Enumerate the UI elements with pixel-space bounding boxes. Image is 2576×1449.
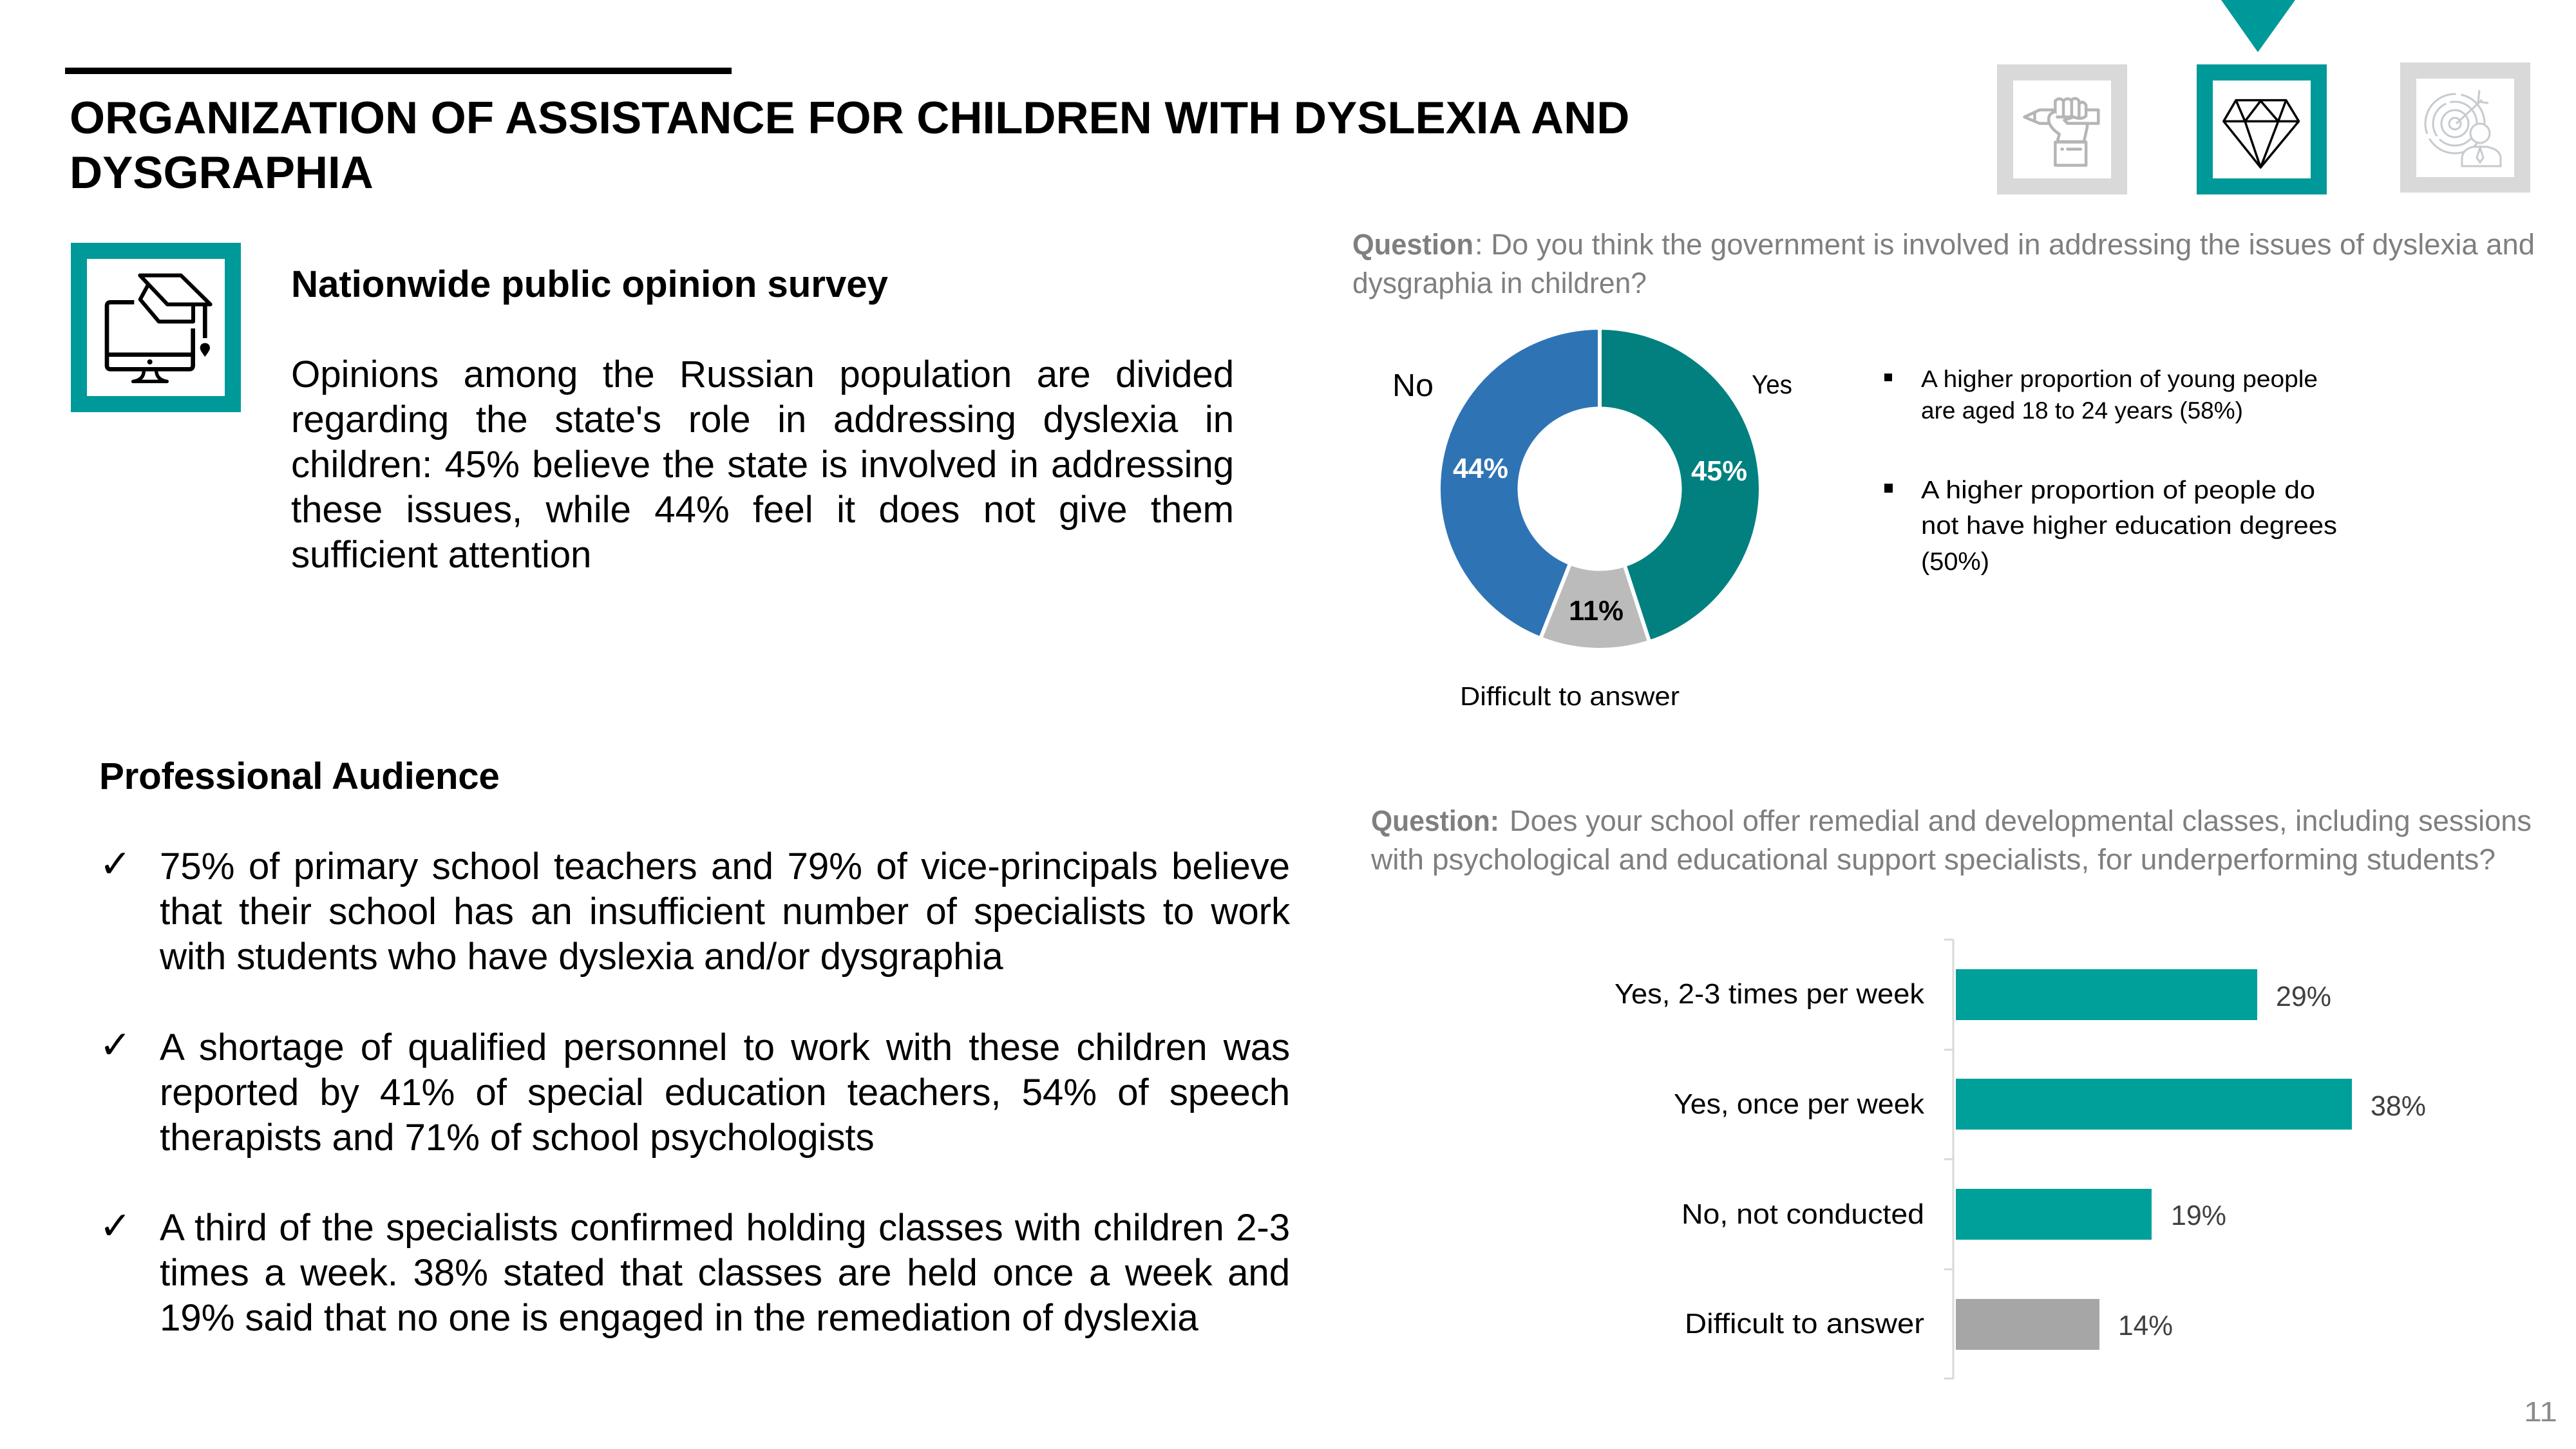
page number: 11 bbox=[2524, 1396, 2557, 1428]
icon: target with person bbox=[2400, 62, 2530, 193]
bar category labels bbox=[1615, 978, 1925, 1340]
donut value labels: 44% bbox=[1453, 453, 1508, 484]
title: DYSGRAPHIA bbox=[70, 147, 374, 198]
bar value labels: 19% bbox=[2171, 1200, 2226, 1231]
text block: bullet 3 class frequency bbox=[160, 1207, 1290, 1339]
bar chart axis bbox=[1944, 940, 1953, 1379]
donut category labels bbox=[1392, 368, 1792, 711]
text block: bullet 1 shortage of specialists bbox=[160, 846, 1291, 978]
text block: bullet 2 qualified personnel: therapists and 71% of school psychologists bbox=[160, 1117, 874, 1159]
text block: bullet 3 class frequency: times a week. 38% stated that classes are held once a week and bbox=[160, 1252, 1290, 1294]
question 1 text: : Do you think the government is involved in addressing the issues of dyslexia and bbox=[1475, 228, 2535, 261]
check mark bullets: ✓ bbox=[99, 1204, 131, 1249]
icon: hand holding pencil bbox=[1997, 64, 2127, 194]
title rule bbox=[65, 68, 732, 74]
title bbox=[70, 93, 1629, 198]
text block: bullet 1 shortage of specialists: with students who have dyslexia and/or dysgraphia bbox=[160, 936, 1003, 978]
text block: bullet 2 qualified personnel: A shortage of qualified personnel to work with these children was bbox=[160, 1027, 1290, 1068]
question 2 text: with psychological and educational support specialists, for underperforming students? bbox=[1370, 843, 2496, 876]
donut category labels: Difficult to answer bbox=[1460, 681, 1680, 711]
donut value labels: 45% bbox=[1691, 455, 1747, 487]
icon: monitor with graduation cap bbox=[71, 243, 241, 412]
donut value labels: 11% bbox=[1569, 595, 1624, 627]
demographic notes: A higher proportion of young people bbox=[1921, 366, 2318, 392]
bar value labels: 38% bbox=[2371, 1090, 2426, 1122]
donut chart bbox=[1439, 328, 1761, 650]
bar value labels: 14% bbox=[2118, 1310, 2173, 1341]
donut value labels bbox=[1453, 453, 1747, 627]
demographic notes: (50%) bbox=[1921, 548, 1989, 576]
donut category labels: No bbox=[1392, 368, 1434, 403]
question 2 text: Question: bbox=[1371, 804, 1499, 837]
text block: bullet 2 qualified personnel: reported by 41% of special education teachers, 54% of speech bbox=[160, 1072, 1290, 1113]
question 1 text: Question bbox=[1352, 228, 1473, 261]
text block: survey summary: regarding the state's role in addressing dyslexia in bbox=[291, 399, 1234, 440]
bar category labels: No, not conducted bbox=[1681, 1198, 1924, 1230]
navigation marker triangle bbox=[2221, 0, 2295, 52]
heading: professional audience: Professional Audience bbox=[99, 755, 500, 797]
demographic notes: A higher proportion of people do bbox=[1921, 477, 2315, 504]
text block: survey summary: these issues, while 44% feel it does not give them bbox=[291, 489, 1234, 531]
demographic notes: are aged 18 to 24 years (58%) bbox=[1921, 397, 2243, 424]
bar category labels: Yes, once per week bbox=[1674, 1088, 1925, 1120]
bar category labels: Difficult to answer bbox=[1685, 1308, 1924, 1340]
bars bbox=[1956, 969, 2352, 1350]
segment: yes 45% bbox=[1600, 328, 1761, 642]
text block: survey summary bbox=[291, 354, 1234, 576]
question 2 text bbox=[1370, 804, 2532, 876]
check mark bullets: ✓ bbox=[99, 842, 131, 887]
donut category labels: Yes bbox=[1752, 370, 1792, 399]
text block: bullet 1 shortage of specialists: that their school has an insufficient number of specialists to work bbox=[160, 891, 1290, 933]
heading: nationwide survey: Nationwide public opinion survey bbox=[291, 263, 889, 305]
text block: bullet 2 qualified personnel bbox=[160, 1027, 1290, 1159]
segment: no 44% bbox=[1439, 328, 1600, 638]
check mark bullets: ✓ bbox=[99, 1023, 131, 1068]
question 1 text bbox=[1352, 228, 2535, 299]
text block: survey summary: Opinions among the Russian population are divided bbox=[291, 354, 1234, 395]
bar category labels: Yes, 2-3 times per week bbox=[1615, 978, 1925, 1010]
bar value labels bbox=[2118, 981, 2426, 1341]
segment: difficult 11% bbox=[1540, 564, 1649, 650]
question 2 text: Does your school offer remedial and developmental classes, including sessions bbox=[1510, 804, 2532, 837]
title: ORGANIZATION OF ASSISTANCE FOR CHILDREN WITH DYSLEXIA AND bbox=[70, 93, 1629, 144]
text block: survey summary: sufficient attention bbox=[291, 534, 591, 576]
text block: bullet 3 class frequency: 19% said that no one is engaged in the remediation of dyslexia bbox=[160, 1297, 1198, 1339]
text block: survey summary: children: 45% believe the state is involved in addressing bbox=[291, 444, 1234, 486]
check mark bullets bbox=[99, 842, 131, 1249]
demographic notes bbox=[1884, 366, 2337, 576]
bar value labels: 29% bbox=[2276, 981, 2331, 1012]
icon: diamond (active) bbox=[2197, 64, 2327, 194]
text block: bullet 1 shortage of specialists: 75% of primary school teachers and 79% of vice-principals believe bbox=[160, 846, 1290, 887]
text block: bullet 3 class frequency: A third of the specialists confirmed holding classes with children 2-3 bbox=[160, 1207, 1290, 1249]
question 1 text: dysgraphia in children? bbox=[1352, 267, 1647, 299]
bar chart bbox=[1615, 940, 2426, 1379]
demographic notes: not have higher education degrees bbox=[1921, 512, 2337, 540]
